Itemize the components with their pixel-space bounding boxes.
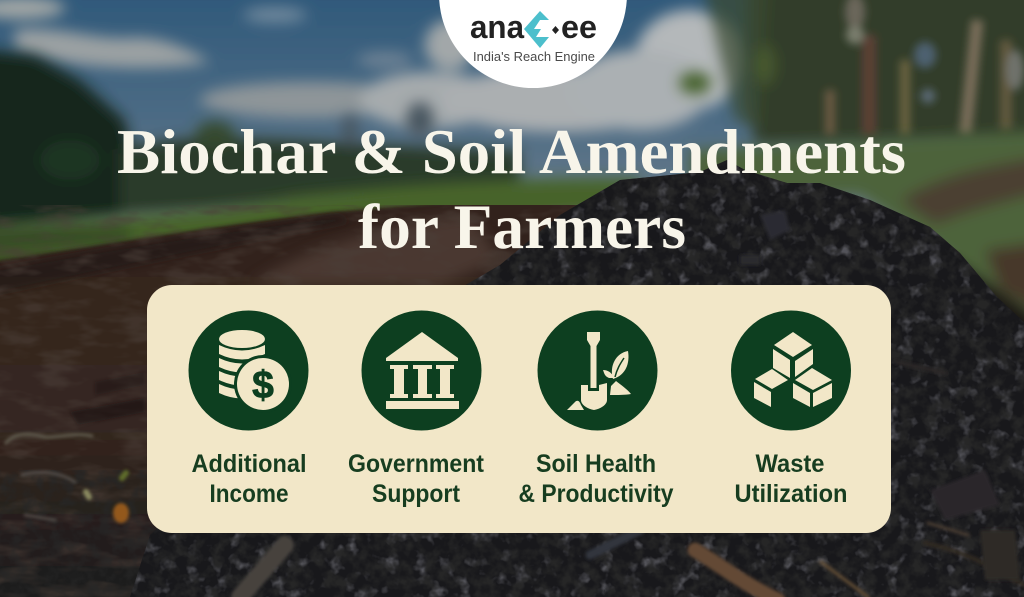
- icon: coins and dollar: [188, 310, 308, 430]
- icon: shovel and plant: [538, 310, 658, 430]
- benefit: additional income: [188, 310, 308, 508]
- label: [518, 450, 674, 508]
- orange fragment: [113, 503, 129, 523]
- logo tagline: India's Reach Engine: [473, 50, 595, 64]
- label: [348, 450, 485, 508]
- benefit: waste utilization: [731, 310, 851, 508]
- title: [117, 117, 906, 262]
- logo wordmark: ee: [561, 9, 597, 45]
- biochar pile: [130, 160, 1024, 597]
- label: Additional: [192, 450, 306, 478]
- label: Government: [348, 450, 485, 478]
- label: Utilization: [734, 480, 848, 508]
- benefit: soil health: [518, 310, 674, 508]
- green strip and slope: [0, 130, 1024, 330]
- title: Biochar & Soil Amendments: [117, 117, 906, 187]
- logo wordmark: [470, 9, 597, 48]
- label: & Productivity: [518, 480, 674, 508]
- icon: government building: [362, 310, 482, 430]
- charcoal chips and sticks: [240, 362, 1024, 597]
- label: Soil Health: [536, 450, 656, 478]
- soil field: [0, 195, 600, 597]
- label: Support: [372, 480, 461, 508]
- label: Waste: [756, 450, 825, 478]
- label: [192, 450, 306, 508]
- distant landscape: [0, 0, 1024, 330]
- icon: logo diamond: [524, 11, 549, 48]
- logo badge: [439, 0, 627, 88]
- panel: benefits: [147, 285, 891, 533]
- title: for Farmers: [358, 192, 686, 262]
- pale debris on soil: [6, 434, 126, 520]
- icon: cubes: [731, 310, 851, 430]
- dollar sign: $: [252, 364, 274, 407]
- logo wordmark: ana: [470, 9, 524, 45]
- label: Income: [210, 480, 289, 508]
- benefit: government support: [348, 310, 485, 508]
- right palms: [679, 0, 1024, 145]
- label: [734, 450, 848, 508]
- left trees: [0, 48, 520, 235]
